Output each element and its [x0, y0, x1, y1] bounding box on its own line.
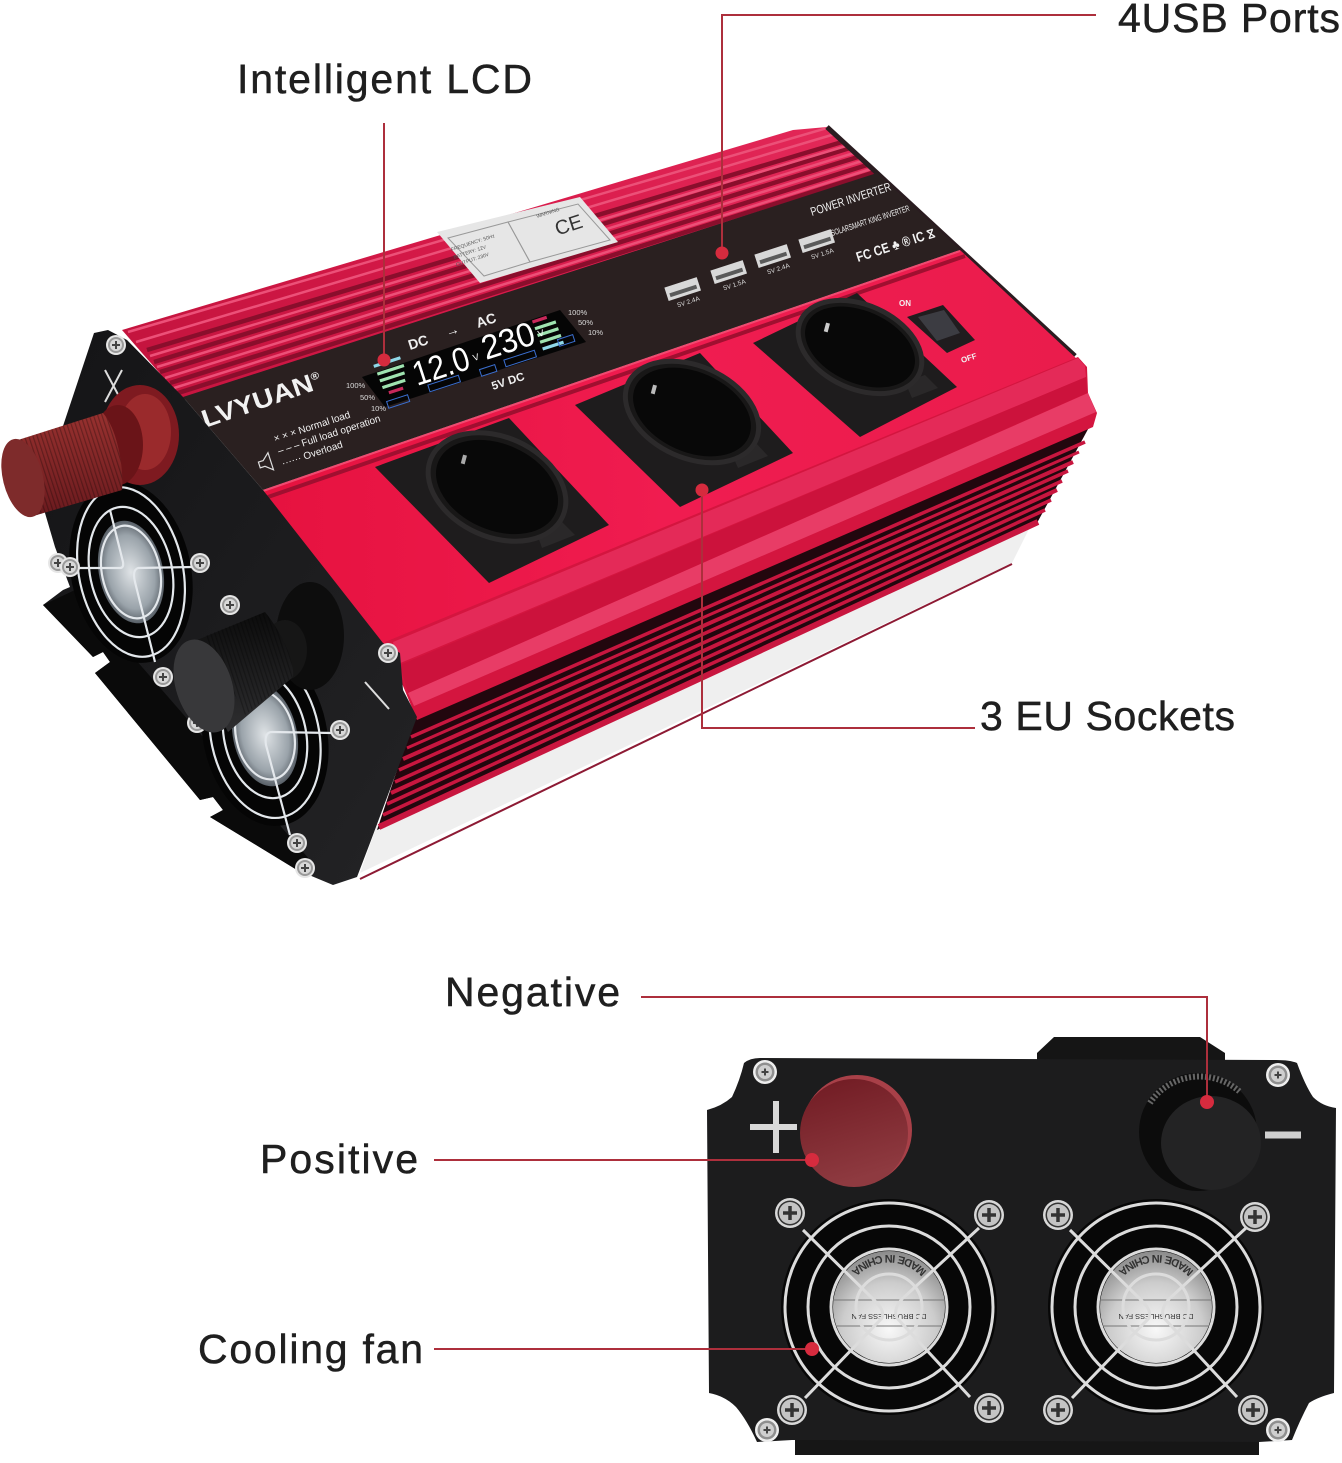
- callout: Intelligent LCD: [237, 56, 532, 366]
- callout: Negative: [445, 969, 1214, 1109]
- socket 3: [753, 282, 957, 437]
- LCD display: V: [472, 352, 480, 363]
- callout: Intelligent LCD: Intelligent LCD: [237, 56, 532, 102]
- bottom foot: [795, 1438, 1259, 1455]
- callout: 3 EU Sockets: [696, 484, 1235, 739]
- fan hub: DC BRUSHLESS FAN: [1118, 1312, 1194, 1321]
- LCD percent labels, left: [346, 381, 386, 413]
- LCD display: 12.0: [408, 340, 475, 394]
- mark: positive terminal symbol: [105, 370, 122, 402]
- fan hub: [1100, 1251, 1212, 1363]
- LCD display: [362, 310, 586, 408]
- white reflection band under the body: [360, 518, 1037, 873]
- fan hub: MADE IN CHINA: [851, 1255, 926, 1276]
- brand logo: LVYUAN: [198, 374, 302, 434]
- USB ports row: 5V 2.4A: [677, 295, 701, 309]
- negative knob face: [1139, 1073, 1261, 1191]
- DC to AC caption: DC: [406, 331, 430, 353]
- panel: inverter three-quarter view: [0, 127, 1097, 885]
- buzzer legend: ······ Overload: [281, 440, 344, 470]
- panel: inverter end view: [707, 1037, 1336, 1455]
- LCD percent labels, right: [568, 308, 603, 337]
- fan hub: MADE IN CHINA: [1118, 1255, 1194, 1276]
- power switch: ON: [899, 299, 911, 308]
- dark edge at far end: [827, 127, 1075, 356]
- top bump of socket edge: [1037, 1037, 1225, 1062]
- callout: Positive: [260, 1136, 819, 1182]
- cooling fan left: [775, 1198, 1004, 1425]
- socket face: [263, 250, 1080, 665]
- socket 2: [575, 342, 793, 507]
- front rounded bevel: [385, 357, 1097, 720]
- power switch: OFF: [960, 351, 978, 365]
- LCD percent labels, right: 50%: [578, 318, 593, 327]
- certification label sticker: BATTERY: 12V: [453, 244, 488, 261]
- product name and certification marks: [809, 180, 937, 265]
- product name and certification marks: SOLARSMART KING INVERTER: [830, 203, 911, 238]
- fan hub: DC BRUSHLESS FAN: [851, 1312, 927, 1321]
- LCD percent labels, left: 100%: [346, 381, 366, 390]
- positive terminal knob, red: [0, 385, 179, 522]
- top ribbed surface: [122, 127, 880, 400]
- buzzer legend: [252, 401, 386, 476]
- USB ports row: [664, 229, 838, 311]
- DC to AC caption: →: [443, 320, 461, 340]
- certification label sticker: CE: [552, 211, 585, 240]
- plate corner screws: [753, 1060, 1290, 1442]
- DC to AC caption: [406, 309, 526, 393]
- plus symbol: [750, 1101, 797, 1153]
- callout: Positive: Positive: [260, 1136, 418, 1182]
- USB ports row: 5V 1.5A: [811, 247, 835, 261]
- brown control panel: [183, 173, 960, 490]
- LCD percent labels, left: 50%: [360, 393, 375, 402]
- cooling fan 1, angled: [53, 470, 210, 687]
- certification label sticker: WARNING: [536, 207, 561, 220]
- cooling fan right: [1043, 1199, 1270, 1425]
- certification label sticker: [437, 197, 618, 283]
- black end plate: [43, 330, 417, 885]
- LCD display: 230: [477, 315, 540, 368]
- LCD percent labels, left: 10%: [371, 404, 386, 413]
- callout: Cooling fan: [198, 1326, 819, 1372]
- product name and certification marks: FC CE ♣ ® IC ⧖: [854, 224, 937, 265]
- DC to AC caption: AC: [474, 309, 498, 331]
- LCD percent labels, right: 10%: [588, 328, 603, 337]
- cooling fan 2, angled: [185, 632, 350, 853]
- callout: 3 EU Sockets: 3 EU Sockets: [980, 693, 1235, 739]
- buzzer legend: × × × Normal load: [273, 410, 352, 445]
- LCD percent labels, right: 100%: [568, 308, 588, 317]
- LCD display: V: [537, 328, 545, 339]
- side cooling fins: [377, 420, 1093, 830]
- fan hub: [833, 1251, 945, 1363]
- negative terminal knob, black: [163, 582, 344, 740]
- callout: 4USB Ports: [716, 0, 1340, 260]
- mark: negative terminal symbol: [365, 682, 389, 709]
- callout: Negative: Negative: [445, 969, 620, 1015]
- USB ports row: 5V 2.4A: [767, 262, 791, 276]
- product name and certification marks: POWER INVERTER: [809, 180, 893, 219]
- certification label sticker: OUTPUT: 230V: [455, 252, 491, 268]
- DC to AC caption: 5V DC: [490, 371, 526, 393]
- callout: Cooling fan: Cooling fan: [198, 1326, 423, 1372]
- positive knob face: [800, 1075, 912, 1187]
- brand logo: ®: [309, 370, 322, 383]
- socket 1: [375, 412, 609, 583]
- buzzer legend: – – – Full load operation: [277, 414, 382, 457]
- plate screws: [48, 335, 398, 878]
- black end plate: [707, 1058, 1336, 1442]
- certification label sticker: FREQUENCY: 50Hz: [450, 233, 496, 253]
- USB ports row: 5V 1.5A: [723, 278, 747, 292]
- minus symbol: [1265, 1132, 1301, 1138]
- power switch: [899, 299, 978, 365]
- speaker icon: [257, 453, 274, 474]
